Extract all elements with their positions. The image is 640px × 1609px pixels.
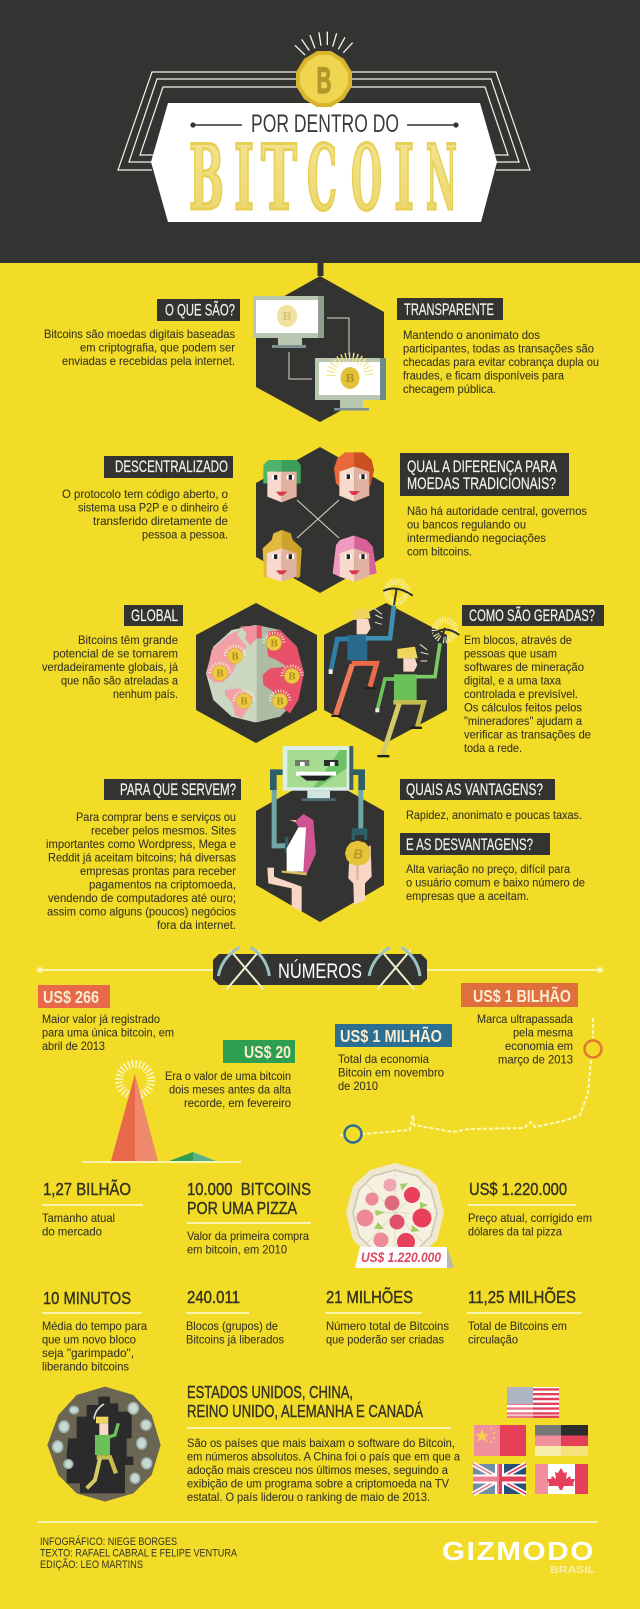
- heading: vantagens: QUAIS AS VANTAGENS?: [406, 780, 543, 799]
- heading: [397, 298, 503, 320]
- icon: hand holding coin: B: [353, 847, 363, 862]
- text block: importantes como Wordpress, Mega e: [46, 837, 236, 851]
- credits: [40, 1535, 238, 1571]
- icon: robot arms: [270, 769, 367, 853]
- stat: 21 milhões: Número total de Bitcoins: [326, 1319, 449, 1333]
- stat: 240.011: Bitcoins já liberados: [186, 1332, 284, 1346]
- stat: US$ 1.220.000: [468, 1179, 592, 1238]
- icon: pizza with price tag: [346, 1163, 454, 1268]
- credits: EDIÇÃO: LEO MARTINS: [40, 1558, 143, 1571]
- hexagon: transparency illustration: [253, 276, 386, 422]
- title: bitcoin: I: [394, 125, 414, 231]
- chart: price peaks: [82, 1064, 241, 1162]
- text block: pagamentos na criptomoeda,: [89, 878, 236, 892]
- icon: coins on globe: B: [276, 698, 284, 708]
- text block: digital, e a uma taxa: [464, 674, 561, 688]
- icon: pink-haired face: [333, 536, 377, 582]
- icon: bitcoin coin: [296, 51, 352, 107]
- text block: [46, 810, 236, 932]
- stat: US$ 1 bilhão: Marca ultrapassada: [477, 1012, 573, 1026]
- heading: [157, 299, 240, 321]
- stat: US$ 1 bilhão: [461, 983, 578, 1066]
- subtitle: por dentro do: POR DENTRO DO: [251, 110, 399, 138]
- stat: US$ 1.220.000: US$ 1.220.000: [469, 1179, 567, 1199]
- heading: desvantagens: [400, 833, 550, 855]
- gems: [53, 1403, 152, 1483]
- flag: alemanha: [535, 1425, 588, 1456]
- stat: US$ 20: dois meses antes da alta: [169, 1082, 291, 1096]
- text block: [44, 327, 235, 368]
- text block: sistema usa P2P e o dinheiro é: [78, 500, 228, 514]
- text block: com bitcoins.: [407, 544, 472, 558]
- text block: Mantendo o anonimato dos: [403, 328, 540, 342]
- stat: 11,25 milhões: circulação: [468, 1332, 518, 1346]
- stat: US$ 20: recorde, em fevereiro: [184, 1096, 291, 1110]
- stat: US$ 1 bilhão: economia em: [505, 1039, 573, 1053]
- icon: coins on globe: B: [216, 670, 224, 680]
- text block: enviadas e recebidas pela internet.: [62, 354, 235, 368]
- panel: global: [42, 605, 183, 701]
- flag: china: [474, 1425, 526, 1456]
- stat: 10 minutos: [42, 1288, 147, 1374]
- heading: QUAL A DIFERENÇA PARA: [407, 457, 557, 476]
- text block: intermediando negociações: [407, 531, 546, 545]
- heading: [462, 605, 604, 626]
- icon: coins on globe: B: [270, 640, 278, 650]
- stat: 10 minutos: que um novo bloco: [42, 1332, 136, 1346]
- heading: O QUE SÃO?: [165, 300, 235, 320]
- flag: estados unidos: [507, 1387, 559, 1418]
- text block: fraudes, e ficam disponíveis para: [403, 368, 564, 382]
- stat: 11,25 milhões: [467, 1286, 582, 1346]
- panel: header: N: [426, 125, 457, 231]
- icon: penguin: [282, 814, 316, 875]
- stat: US$ 1 bilhão: US$ 1 BILHÃO: [473, 985, 571, 1006]
- stat: 240.011: 240.011: [187, 1287, 240, 1307]
- stat: 11,25 milhões: Total de Bitcoins em: [468, 1319, 567, 1333]
- heading: PARA QUE SERVEM?: [120, 780, 236, 799]
- logo: gizmodo brasil: [442, 1536, 595, 1576]
- stat: US$ 266: para uma única bitcoin, em: [42, 1026, 174, 1040]
- icon: blue miner: [329, 582, 413, 717]
- stat: US$ 1 milhão: [335, 1024, 452, 1093]
- icon: coins on globe: B: [288, 672, 296, 682]
- text block: fora da internet.: [157, 918, 236, 932]
- stat: 11,25 milhões: 11,25 MILHÕES: [468, 1286, 576, 1307]
- chart: dashed growth line: [338, 1018, 602, 1142]
- text block: pessoa a pessoa.: [142, 528, 228, 542]
- stat: US$ 266: US$ 266: [43, 987, 99, 1007]
- stat: US$ 20: US$ 20: [244, 1042, 291, 1062]
- text block: O protocolo tem código aberto, o: [62, 487, 228, 501]
- icon: coin rays: [295, 32, 353, 55]
- icon: globe: [206, 625, 304, 722]
- text block: nenhum país.: [113, 687, 178, 701]
- heading: [124, 605, 183, 626]
- icon: green-haired face: [263, 460, 301, 502]
- stat: 240.011: Blocos (grupos) de: [186, 1319, 278, 1333]
- stat: 1,27 bilhão: 1,27 BILHÃO: [43, 1178, 131, 1199]
- title: bitcoin: T: [261, 125, 297, 231]
- icon: faded monitor: [253, 296, 324, 348]
- text block: ou bancos regulando ou: [407, 518, 526, 532]
- network cross: [297, 500, 339, 538]
- title: bitcoin: B: [189, 125, 224, 231]
- text block: softwares de mineração: [464, 660, 584, 674]
- heading: [104, 456, 233, 478]
- stat: 10 minutos: seja "garimpado",: [42, 1346, 134, 1360]
- text block: checagem pública.: [403, 382, 496, 396]
- text block: desvantagens: empresas que a aceitam.: [406, 889, 529, 903]
- text block: potencial de se tornarem: [53, 646, 178, 660]
- stat: US$ 1.220.000: dólares da tal pizza: [468, 1224, 562, 1238]
- panel: países: [187, 1382, 460, 1504]
- stat: 10 minutos: liberando bitcoins: [42, 1360, 129, 1374]
- miner: [87, 1404, 118, 1488]
- text block: vendendo de computadores até ouro;: [48, 891, 236, 905]
- stat: US$ 1 milhão: Bitcoin em novembro: [338, 1066, 444, 1080]
- text block: estatal. O país liderou o ranking de maio de 2013.: [187, 1490, 430, 1504]
- text block: participantes, todas as transações são: [403, 342, 594, 356]
- text block: empresas prontas para receber: [80, 864, 236, 878]
- credits: INFOGRÁFICO: NIEGE BORGES: [40, 1535, 177, 1548]
- panel: o que são: [44, 299, 240, 368]
- stat: 10.000 bitcoins por uma pizza: POR UMA PIZZA: [187, 1198, 297, 1218]
- section heading: números: NÚMEROS: [278, 960, 362, 983]
- stat: 1,27 bilhão: [42, 1178, 143, 1238]
- text block: Não há autoridade central, governos: [407, 504, 587, 518]
- text block: Bitcoins são moedas digitais baseadas: [44, 327, 235, 341]
- icon: green miner: [375, 620, 459, 757]
- text block: controlada e previsível.: [464, 687, 578, 701]
- text block: [407, 504, 587, 558]
- title: bitcoin: I: [234, 125, 254, 231]
- panel: como são geradas: [462, 605, 604, 755]
- heading: [104, 779, 241, 800]
- title: bitcoin: O: [351, 125, 382, 231]
- panel: qual a diferença: [400, 453, 587, 558]
- text block: Em blocos, através de: [464, 633, 572, 647]
- text block: em números absolutos. A China foi o país que em que a: [187, 1450, 460, 1464]
- text block: toda a rede.: [464, 741, 522, 755]
- icon: coins on globe: B: [240, 698, 248, 708]
- logo: gizmodo brasil: GIZMODO: [442, 1536, 595, 1566]
- text block: [403, 328, 599, 396]
- panel: para que servem: [46, 779, 241, 932]
- heading: desvantagens: E AS DESVANTAGENS?: [406, 835, 533, 854]
- stat: US$ 1 milhão: US$ 1 MILHÃO: [340, 1025, 442, 1046]
- stat: US$ 1.220.000: Preço atual, corrigido em: [468, 1211, 592, 1225]
- icon: coins on globe: [210, 633, 302, 708]
- text block: exibição de um programa sobre a criptomoeda na TV: [187, 1476, 449, 1490]
- stat: 10.000 bitcoins por uma pizza: [187, 1179, 311, 1256]
- icon: bitcoin coin: B: [316, 60, 332, 101]
- hexagon: globe illustration: [196, 603, 317, 743]
- section heading: números: [37, 947, 603, 989]
- icon: glowing monitor: B: [345, 372, 355, 385]
- text block: [62, 487, 228, 542]
- stat: 240.011: [186, 1287, 284, 1346]
- heading: [400, 453, 569, 496]
- icon: crossed pickaxes right: [369, 947, 420, 989]
- icon: coins on globe: B: [231, 652, 239, 662]
- icon: glowing monitor: [315, 357, 386, 410]
- text block: Os cálculos feitos pelos: [464, 700, 582, 714]
- icon: pizza with price tag: US$ 1.220.000: [361, 1250, 441, 1265]
- credits: TEXTO: RAFAEL CABRAL E FELIPE VENTURA: [40, 1548, 238, 1560]
- stat: US$ 20: [165, 1040, 295, 1110]
- stat: US$ 20: Era o valor de uma bitcoin: [165, 1069, 291, 1083]
- hexagon: robot and penguin illustration: [256, 746, 384, 922]
- title banner: [151, 103, 497, 222]
- text block: [42, 633, 178, 701]
- heading: GLOBAL: [131, 606, 178, 625]
- text block: São os países que mais baixam o software do Bitcoin,: [187, 1436, 455, 1450]
- stat: 10.000 bitcoins por uma pizza: Valor da primeira compra: [187, 1229, 309, 1243]
- icon: monitor robot: [283, 746, 353, 801]
- logo: gizmodo brasil: BRASIL: [550, 1565, 595, 1576]
- hexagon: miners illustration: [324, 582, 459, 757]
- icon: hand holding coin: [345, 841, 372, 905]
- icon: crossed pickaxes left: [218, 947, 269, 989]
- icon: orange-haired face: [334, 452, 374, 502]
- stat: US$ 1 bilhão: março de 2013: [498, 1052, 573, 1066]
- stat: 21 milhões: que poderão ser criadas: [326, 1332, 444, 1346]
- text block: transferido diretamente de: [93, 514, 228, 528]
- stat: 10.000 bitcoins por uma pizza: 10.000 BITCOINS: [187, 1179, 311, 1199]
- stat: 10.000 bitcoins por uma pizza: em bitcoin, em 2010: [187, 1242, 287, 1256]
- stat: US$ 266: Maior valor já registrado: [42, 1012, 160, 1026]
- text block: desvantagens: [406, 862, 585, 903]
- flag: reino unido: [473, 1464, 526, 1494]
- text block: [187, 1436, 460, 1504]
- heading: ESTADOS UNIDOS, CHINA,: [187, 1382, 353, 1402]
- connector stem: [318, 263, 324, 276]
- connector lines: [289, 318, 349, 379]
- flag: canadá: [535, 1464, 588, 1494]
- heading: TRANSPARENTE: [404, 300, 494, 319]
- stat: 1,27 bilhão: do mercado: [42, 1224, 102, 1238]
- stat: US$ 1 milhão: de 2010: [338, 1079, 378, 1093]
- panel: vantagens e desvantagens: [400, 779, 585, 903]
- panel: transparente: [397, 298, 599, 396]
- text block: adoção mais cresceu nos últimos meses, seguindo a: [187, 1463, 448, 1477]
- stat: US$ 1 milhão: Total da economia: [338, 1052, 429, 1066]
- heading: DESCENTRALIZADO: [115, 457, 228, 476]
- heading: REINO UNIDO, ALEMANHA E CANADÁ: [187, 1401, 423, 1421]
- text block: em criptografia, que podem ser: [80, 340, 235, 354]
- text block: pessoas que usam: [464, 646, 557, 660]
- text block: assim como alguns (poucos) negócios: [47, 904, 236, 918]
- title: bitcoin: [189, 125, 457, 231]
- heading: [187, 1382, 423, 1421]
- heading: MOEDAS TRADICIONAIS?: [407, 474, 556, 493]
- text block: [464, 633, 591, 755]
- stat: 10 minutos: Média do tempo para: [42, 1319, 147, 1333]
- text block: que não são atreladas a: [61, 674, 178, 688]
- text block: verdadeiramente globais, já: [42, 660, 178, 674]
- text block: "mineradores" ajudam a: [464, 714, 582, 728]
- stat: US$ 1 bilhão: pela mesma: [513, 1026, 573, 1040]
- text block: checadas para evitar cobrança dupla ou: [403, 355, 599, 369]
- text block: vantagens: Rapidez, anonimato e poucas taxas.: [406, 808, 582, 822]
- text block: Para comprar bens e serviços ou: [76, 810, 236, 824]
- text block: receber pelos mesmos. Sites: [91, 824, 236, 838]
- text block: desvantagens: o usuário comum e baixo número de: [406, 876, 585, 890]
- hexagon: people network illustration: [256, 447, 384, 593]
- title: bitcoin: C: [307, 125, 337, 231]
- stat: 21 milhões: 21 MILHÕES: [326, 1286, 413, 1307]
- stat: US$ 266: abril de 2013: [42, 1039, 105, 1053]
- stat: 1,27 bilhão: Tamanho atual: [42, 1211, 115, 1225]
- text block: verificar as transações de: [464, 728, 591, 742]
- panel: header: [0, 0, 640, 276]
- stat: US$ 266: [38, 985, 174, 1053]
- header frame lines: [118, 72, 530, 170]
- icon: mine with miner: [47, 1387, 161, 1502]
- panel: descentralizado: [62, 456, 233, 542]
- icon: left hand: [267, 868, 302, 912]
- text block: Reddit já aceitam bitcoins; há diversas: [48, 850, 236, 864]
- text block: Bitcoins têm grande: [78, 633, 178, 647]
- icon: faded monitor: B: [282, 310, 292, 323]
- stat: 10 minutos: 10 MINUTOS: [43, 1288, 131, 1308]
- text block: desvantagens: Alta variação no preço, difícil para: [406, 862, 570, 876]
- stat: 21 milhões: [325, 1286, 449, 1346]
- heading: vantagens: [400, 779, 555, 800]
- icon: blonde face: [263, 530, 302, 582]
